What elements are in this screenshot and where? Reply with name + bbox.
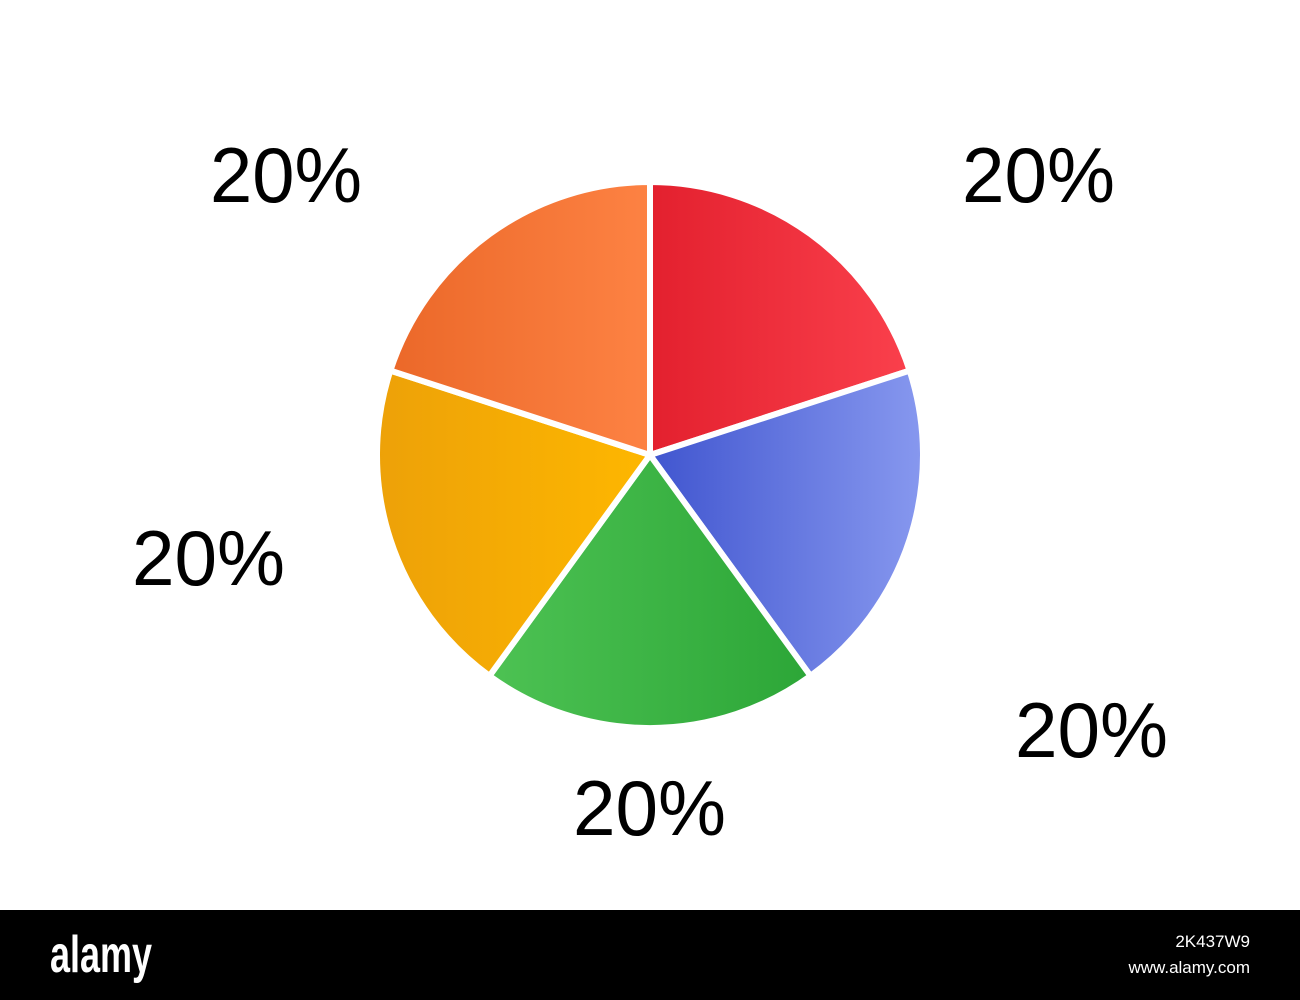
- slice: red: [650, 182, 910, 455]
- footer logo: alamy: [50, 926, 152, 984]
- slice: green: [490, 455, 810, 728]
- label: bottom: 20%: [573, 764, 726, 852]
- label: bottom-right: 20%: [1015, 686, 1168, 774]
- label: top-right: 20%: [962, 131, 1115, 219]
- label: top-left: 20%: [210, 131, 362, 219]
- slice: blue: [650, 371, 923, 676]
- pie chart: [377, 182, 923, 728]
- label: left: 20%: [132, 514, 285, 602]
- footer url: www.alamy.com: [1127, 958, 1250, 977]
- slice: orange: [390, 182, 650, 455]
- footer bar: [0, 910, 1300, 1000]
- slice: yellow: [377, 371, 650, 676]
- footer id: 2K437W9: [1175, 932, 1250, 951]
- labels: [132, 131, 1168, 852]
